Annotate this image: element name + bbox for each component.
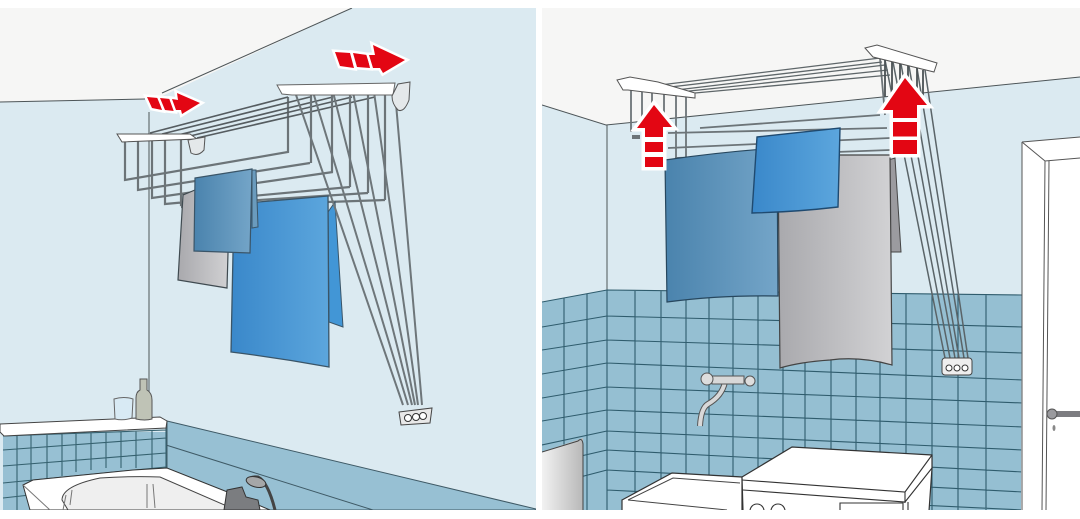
medium blue towel fold (252, 170, 258, 228)
wall (0, 8, 536, 510)
upper wall (542, 78, 1080, 302)
grey towel (178, 190, 230, 288)
shelf (0, 417, 167, 436)
rack rails, left part (125, 95, 385, 207)
tiled wall (542, 290, 1023, 510)
bottle (136, 379, 152, 420)
arrow small pointing up (637, 105, 672, 167)
blue wall tiling band (167, 421, 536, 510)
door (1021, 137, 1080, 510)
bathtub (23, 468, 270, 510)
wall cleat anchor (399, 408, 432, 425)
arrow large pointing up (883, 78, 927, 154)
big blue towel (231, 196, 329, 367)
lower rails and hangers (631, 58, 890, 158)
big blue towel side fold (328, 202, 343, 327)
narrow grey towel fold (890, 158, 902, 252)
arrow small pointing right (147, 93, 200, 114)
panel: rack folded out against sloped wall (0, 8, 536, 510)
grey towel (778, 155, 892, 368)
tile band line (166, 445, 373, 510)
dark blue towel (665, 148, 778, 302)
ceiling edge lines (0, 8, 352, 420)
left machine (622, 473, 742, 511)
panel: rack folded up to the ceiling (542, 8, 1080, 511)
left rack bracket (117, 134, 205, 154)
sloped ceiling (0, 8, 352, 102)
blue towel (752, 128, 840, 213)
long rails (660, 58, 890, 93)
bath tap and shower head (224, 475, 275, 510)
wall tap (700, 373, 755, 426)
glass (114, 398, 133, 420)
right rack bracket (277, 82, 410, 111)
medium blue towel (194, 169, 252, 253)
ceiling edge and corner lines (542, 77, 1080, 293)
door handle (1047, 409, 1080, 431)
wires to wall anchor (885, 60, 968, 358)
wall cleat anchor (942, 358, 972, 375)
rack wires fanning to wall anchor (295, 92, 422, 405)
right ceiling bracket (865, 45, 937, 100)
left ceiling bracket (617, 77, 695, 98)
tiled bath surround (3, 421, 166, 510)
arrow large pointing right (335, 45, 405, 73)
right washing machine (742, 447, 932, 511)
ceiling (542, 8, 1080, 124)
towel rail radiator (542, 438, 583, 510)
